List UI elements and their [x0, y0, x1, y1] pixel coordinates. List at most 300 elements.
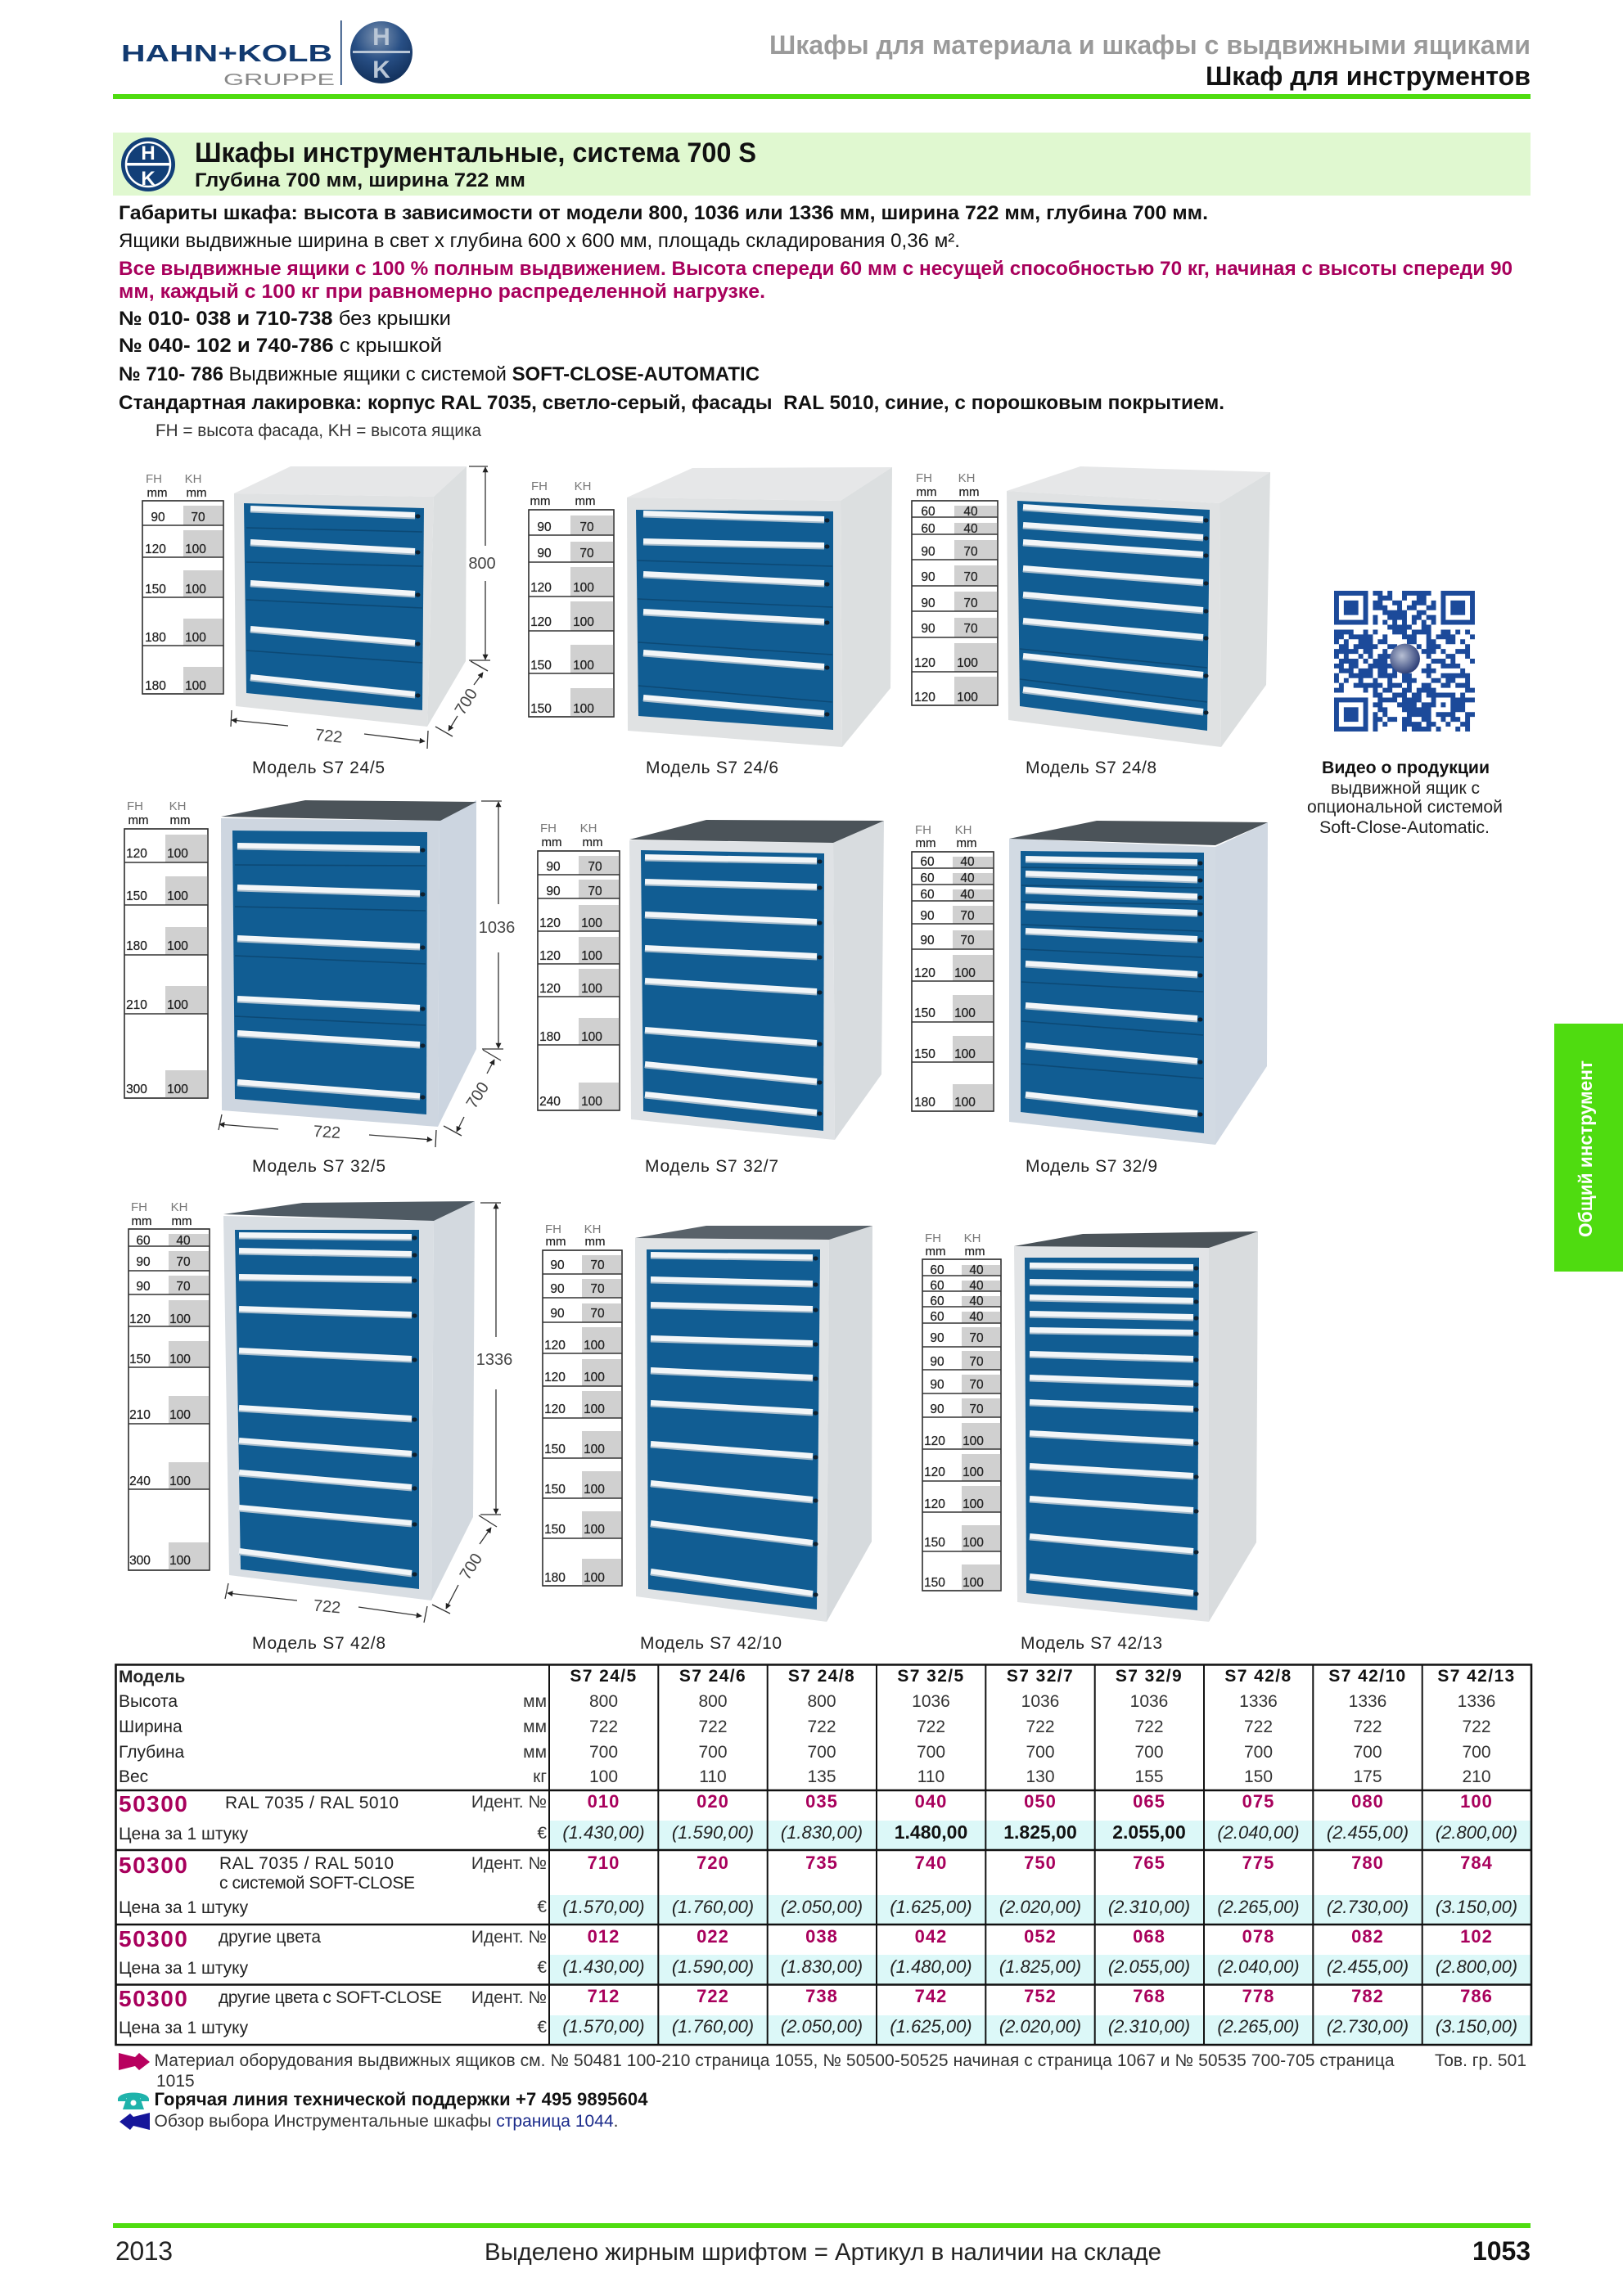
drawer size table: 120	[544, 1371, 566, 1384]
dimension lines: 700	[452, 686, 481, 718]
height row: 1336	[1349, 1692, 1386, 1711]
drawer size table: 70	[960, 909, 975, 923]
drawer size table: 60	[921, 522, 935, 536]
drawer size table	[124, 799, 208, 1098]
drawer size table: 70	[960, 934, 975, 948]
drawer size table: 60	[930, 1263, 944, 1277]
article block: other colours with SOFT-CLOSE: 738	[805, 1986, 838, 2006]
drawer size table: 100	[573, 702, 594, 716]
company logo: H	[372, 24, 390, 51]
drawer size table: 70	[588, 860, 602, 874]
article block: RAL with SOFT-CLOSE: 50300	[119, 1853, 188, 1878]
drawer size table: 70	[590, 1307, 605, 1321]
drawer size table: 100	[584, 1402, 605, 1416]
article block: other colours: (2.040,00)	[1217, 1956, 1300, 1977]
article block: RAL 7035 / RAL 5010: 100	[1460, 1791, 1493, 1812]
article block: other colours: 012	[588, 1926, 620, 1947]
article block: RAL with SOFT-CLOSE: (2.310,00)	[1108, 1897, 1190, 1917]
drawer size table: 100	[169, 1353, 191, 1366]
drawer size table: 60	[136, 1234, 151, 1248]
article block: other colours: 022	[697, 1926, 729, 1947]
footer: legend: Выделено жирным шрифтом = Артикул в наличии на складе	[485, 2239, 1161, 2266]
drawer size table: 100	[581, 916, 602, 930]
drawer size table: mm	[545, 1235, 566, 1249]
drawer size table: 150	[544, 1443, 566, 1456]
drawer size table: 60	[920, 888, 935, 902]
article block: other colours: (1.430,00)	[562, 1956, 645, 1977]
width row: 722	[698, 1717, 728, 1736]
QR code with product video note	[1307, 593, 1503, 837]
drawer size table: 70	[963, 622, 978, 636]
drawer size table: 120	[126, 847, 147, 861]
drawer size table: 150	[914, 1006, 935, 1020]
drawer size table: 180	[539, 1030, 561, 1044]
weight row: 175	[1353, 1767, 1382, 1786]
drawer size table: 100	[573, 615, 594, 629]
drawer size table: 120	[530, 615, 552, 629]
drawer size table: 70	[963, 545, 978, 559]
drawer size table: KH	[584, 1222, 601, 1236]
drawer size table: 70	[579, 520, 594, 534]
article block: other colours: (2.055,00)	[1108, 1956, 1190, 1977]
article block: RAL 7035 / RAL 5010: €	[537, 1824, 547, 1843]
article block: RAL 7035 / RAL 5010: 050	[1024, 1791, 1057, 1812]
article block: RAL with SOFT-CLOSE: Цена за 1 штуку	[119, 1898, 249, 1917]
drawer size table: 100	[584, 1523, 605, 1537]
drawer size table: mm	[915, 836, 936, 850]
drawer size table: 90	[151, 511, 165, 524]
article block: RAL 7035 / RAL 5010: Цена за 1 штуку	[119, 1825, 249, 1844]
article block: other colours: (2.455,00)	[1327, 1956, 1409, 1977]
panel: model S7 32/5	[124, 799, 515, 1176]
drawer size table: 300	[129, 1554, 151, 1568]
drawer size table: KH	[580, 822, 597, 835]
drawer size table: 100	[584, 1571, 605, 1585]
drawer size table	[142, 472, 223, 694]
model header row: S7 42/13	[1437, 1667, 1516, 1686]
cabinet illustration	[1014, 1231, 1258, 1622]
model label: Модель S7 42/10	[640, 1634, 782, 1653]
cabinet illustration	[1007, 466, 1270, 747]
drawer size table: 60	[930, 1294, 944, 1308]
drawer size table: 120	[924, 1434, 945, 1448]
depth row: 700	[1353, 1743, 1382, 1762]
drawer size table: 90	[930, 1355, 944, 1369]
drawer size table: mm	[170, 813, 190, 827]
company logo	[121, 20, 413, 89]
article block: other colours: 078	[1242, 1926, 1274, 1947]
article block: RAL 7035 / RAL 5010: (2.455,00)	[1327, 1822, 1409, 1843]
article block: other colours with SOFT-CLOSE: (3.150,00)	[1436, 2016, 1517, 2037]
banner subtitle: Глубина 700 мм, ширина 722 мм	[195, 169, 525, 191]
article block: other colours with SOFT-CLOSE: (2.310,00)	[1108, 2016, 1190, 2037]
drawer size table: 70	[963, 570, 978, 584]
weight row: 110	[917, 1767, 944, 1786]
width row	[589, 1717, 1491, 1736]
drawer size table: 100	[167, 998, 188, 1012]
article block: RAL 7035 / RAL 5010: 1.480,00	[895, 1821, 967, 1843]
drawer size table: 70	[588, 885, 602, 898]
article block: other colours with SOFT-CLOSE: (1.570,00)	[562, 2016, 645, 2037]
drawer size table	[922, 1231, 1001, 1591]
drawer size table: 40	[960, 888, 975, 902]
article block: RAL with SOFT-CLOSE: (2.730,00)	[1327, 1897, 1409, 1917]
drawer size table: 120	[914, 656, 935, 670]
drawer size table: 90	[537, 547, 552, 560]
article block: RAL with SOFT-CLOSE: с системой SOFT-CLOSE	[219, 1874, 415, 1893]
description text block: Все выдвижные ящики с 100 % полным выдвижением. Высота спереди 60 мм с несущей способностью 70 кг, начиная с высоты спереди 90	[119, 258, 1513, 280]
article block: RAL 7035 / RAL 5010: (2.800,00)	[1436, 1822, 1517, 1843]
drawer size table: 150	[924, 1576, 945, 1590]
drawer size table: 100	[167, 847, 188, 861]
drawer size table: mm	[128, 813, 149, 827]
drawer size table: 240	[539, 1095, 561, 1109]
drawer size table: 40	[969, 1263, 984, 1277]
article block: RAL 7035 / RAL 5010: 1.825,00	[1003, 1821, 1077, 1843]
article block: other colours with SOFT-CLOSE: 50300	[119, 1986, 188, 2011]
height row: 1036	[912, 1692, 950, 1711]
article block: RAL 7035 / RAL 5010: RAL 7035 / RAL 5010	[225, 1794, 399, 1812]
drawer size table: 100	[581, 1095, 602, 1109]
article block: RAL with SOFT-CLOSE: 735	[805, 1853, 838, 1873]
article block: RAL 7035 / RAL 5010: 010	[588, 1791, 620, 1812]
drawer size table: FH	[131, 1200, 147, 1214]
article block: other colours	[119, 1926, 1517, 1978]
QR code	[1334, 593, 1475, 729]
drawer size table: FH	[545, 1222, 561, 1236]
drawer size table: 70	[590, 1282, 605, 1296]
description text block: № 040- 102 и 740-786 с крышкой	[119, 335, 442, 357]
model header row: S7 24/6	[679, 1667, 746, 1686]
article block: RAL with SOFT-CLOSE: €	[537, 1898, 547, 1916]
drawer size table: 70	[590, 1258, 605, 1272]
dimension lines: 1036	[479, 919, 515, 937]
drawer size table: 90	[921, 597, 935, 610]
drawer size table: 60	[920, 871, 935, 885]
page subcategory heading: Шкаф для инструментов	[1206, 61, 1531, 91]
drawer size table: mm	[575, 494, 596, 508]
article block: other colours: (1.825,00)	[999, 1956, 1081, 1977]
model label: Модель S7 24/6	[646, 759, 778, 777]
footnote: technical hotline: Горячая линия технической поддержки +7 495 9895604	[154, 2089, 648, 2109]
footer: page number: 1053	[1472, 2236, 1531, 2266]
drawer size table: FH	[127, 799, 143, 813]
depth row: 700	[589, 1743, 618, 1762]
article block: RAL with SOFT-CLOSE: 780	[1351, 1853, 1384, 1873]
drawer size table: mm	[542, 835, 561, 849]
drawer size table: 90	[546, 885, 561, 898]
cabinet illustration	[221, 800, 476, 1127]
video caption: Soft-Close-Automatic.	[1319, 818, 1490, 837]
article block: RAL 7035 / RAL 5010: 075	[1242, 1791, 1274, 1812]
article block: RAL with SOFT-CLOSE: 740	[915, 1853, 947, 1873]
drawer size table: 100	[584, 1483, 605, 1497]
drawer size table: 300	[126, 1083, 147, 1096]
weight row: 150	[1244, 1767, 1273, 1786]
description text block: FH = высота фасада, KH = высота ящика	[156, 421, 481, 440]
weight row: 110	[699, 1767, 727, 1786]
banner title: Шкафы инструментальные, система 700 S	[195, 137, 756, 169]
video caption: выдвижной ящик с	[1331, 779, 1480, 798]
drawer size table: 150	[914, 1047, 935, 1061]
drawer size table: 70	[191, 511, 205, 524]
drawer size table: 240	[129, 1474, 151, 1488]
drawer size table: 70	[176, 1280, 191, 1294]
article block: RAL with SOFT-CLOSE: (1.760,00)	[672, 1897, 754, 1917]
drawer size table: 150	[544, 1483, 566, 1497]
icon: HK badge: H	[141, 142, 156, 164]
drawer size table: 60	[921, 505, 935, 519]
drawer size table: mm	[131, 1214, 152, 1228]
drawer size table: 100	[581, 1030, 602, 1044]
drawer size table: 150	[530, 659, 552, 673]
drawer size table: 150	[145, 583, 166, 597]
drawer size table: 70	[969, 1331, 984, 1345]
drawer size table: 40	[963, 505, 978, 519]
drawer size table: 90	[550, 1307, 565, 1321]
article block: RAL 7035 / RAL 5010: Идент. №	[471, 1793, 547, 1812]
panel: model S7 24/8	[912, 466, 1270, 777]
drawer size table: 100	[584, 1443, 605, 1456]
drawer size table: mm	[187, 486, 206, 500]
article block: other colours with SOFT-CLOSE: 722	[697, 1986, 729, 2006]
article block: other colours: 038	[805, 1926, 838, 1947]
drawer size table: 70	[969, 1402, 984, 1416]
drawer size table: 150	[544, 1523, 566, 1537]
article block: RAL with SOFT-CLOSE: RAL 7035 / RAL 5010	[219, 1854, 394, 1873]
panel: model S7 42/13	[922, 1231, 1258, 1653]
drawer size table: 100	[957, 656, 978, 670]
model header row: S7 32/7	[1007, 1667, 1074, 1686]
drawer size table: 100	[954, 1047, 976, 1061]
weight row: 155	[1134, 1767, 1164, 1786]
height row: 800	[698, 1692, 728, 1711]
drawer size table: 100	[957, 691, 978, 705]
row labels: specifications: мм	[523, 1692, 547, 1711]
model label: Модель S7 24/5	[252, 759, 385, 777]
width row: 722	[589, 1717, 618, 1736]
drawer size table: FH	[540, 822, 557, 835]
drawer size table: mm	[147, 486, 167, 500]
page category heading: Шкафы для материала и шкафы с выдвижными ящиками	[769, 30, 1531, 60]
row labels: specifications: Глубина	[119, 1743, 185, 1762]
drawer size table: 100	[169, 1408, 191, 1422]
drawer size table: 70	[579, 547, 594, 560]
drawer size table: 90	[537, 520, 552, 534]
depth row	[589, 1743, 1491, 1762]
width row: 722	[917, 1717, 945, 1736]
article block: other colours: €	[537, 1958, 547, 1977]
drawer size table: FH	[531, 479, 548, 493]
drawer size table	[912, 471, 998, 705]
drawer size table: 100	[584, 1371, 605, 1384]
weight row: 210	[1462, 1767, 1491, 1786]
row labels: specifications: Высота	[119, 1692, 178, 1711]
dimension lines: 722	[313, 1597, 341, 1617]
description text block	[119, 202, 1513, 440]
description text block: № 010- 038 и 710-738 без крышки	[119, 308, 451, 330]
width row: 722	[1462, 1717, 1491, 1736]
drawer size table: 100	[167, 889, 188, 903]
article block: RAL 7035 / RAL 5010: (1.430,00)	[562, 1822, 645, 1843]
dimension lines	[225, 1203, 512, 1623]
drawer size table: mm	[959, 485, 979, 499]
model label: Модель S7 42/8	[252, 1634, 385, 1653]
drawer size table: 100	[963, 1536, 984, 1550]
article block: RAL 7035 / RAL 5010: 50300	[119, 1791, 188, 1817]
drawer size table: 90	[550, 1258, 565, 1272]
drawer size table: 90	[930, 1331, 944, 1345]
price and specification table	[116, 1664, 1531, 2045]
article block: other colours: 068	[1133, 1926, 1165, 1947]
height row: 1336	[1239, 1692, 1278, 1711]
model header row: S7 24/8	[788, 1667, 855, 1686]
drawer size table: 100	[963, 1576, 984, 1590]
article block: RAL with SOFT-CLOSE: Идент. №	[471, 1854, 547, 1873]
article block: RAL with SOFT-CLOSE: (3.150,00)	[1436, 1897, 1517, 1917]
cabinet illustration	[627, 467, 892, 747]
article block: other colours: 50300	[119, 1926, 188, 1952]
article block: RAL with SOFT-CLOSE: 775	[1242, 1853, 1274, 1873]
drawer size table: KH	[171, 1200, 187, 1214]
row labels: specifications: кг	[533, 1767, 547, 1786]
drawer size table: 100	[954, 1006, 976, 1020]
drawer size table: 180	[145, 679, 166, 693]
drawer size table: mm	[584, 1235, 606, 1249]
model label: Модель S7 32/5	[252, 1157, 385, 1176]
drawer size table: 60	[920, 855, 935, 869]
dimension lines	[219, 801, 515, 1147]
drawer size table: 100	[169, 1312, 191, 1326]
description text block: Ящики выдвижные ширина в свет x глубина 600 x 600 мм, площадь складирования 0,36 м².	[119, 230, 960, 252]
drawer size table: 100	[581, 949, 602, 963]
drawer size table: mm	[956, 836, 977, 850]
row labels: specifications: Модель	[119, 1668, 185, 1686]
side tab: general tools	[1554, 1024, 1623, 1272]
article block: other colours: 042	[915, 1926, 947, 1947]
drawer size table: 100	[954, 966, 976, 980]
model header row: S7 42/10	[1328, 1667, 1407, 1686]
row labels: specifications: Вес	[119, 1767, 148, 1786]
cabinet illustration	[1009, 821, 1268, 1145]
drawer size table: mm	[964, 1245, 985, 1258]
article block: other colours: 052	[1024, 1926, 1057, 1947]
drawer size table: 100	[573, 659, 594, 673]
article block: other colours with SOFT-CLOSE: 786	[1460, 1986, 1493, 2006]
article block: RAL with SOFT-CLOSE: 765	[1133, 1853, 1165, 1873]
drawer size table: 180	[544, 1571, 566, 1585]
icon: HK badge: K	[141, 168, 156, 190]
drawer size table: mm	[172, 1214, 192, 1228]
article block: other colours: (1.480,00)	[890, 1956, 972, 1977]
drawer size table: 70	[176, 1255, 191, 1269]
article block: RAL 7035 / RAL 5010: 020	[697, 1791, 729, 1812]
article block: other colours with SOFT-CLOSE: 742	[915, 1986, 947, 2006]
drawer size table: 100	[581, 982, 602, 996]
drawer size table: 90	[546, 860, 561, 874]
article block: RAL with SOFT-CLOSE: 720	[697, 1853, 729, 1873]
dimension lines: 722	[314, 726, 343, 747]
width row: 722	[1134, 1717, 1164, 1736]
article block: other colours with SOFT-CLOSE: (2.020,00)	[999, 2016, 1081, 2037]
drawer size table	[538, 822, 620, 1110]
article block: RAL 7035 / RAL 5010: 2.055,00	[1112, 1821, 1186, 1843]
height row: 800	[807, 1692, 836, 1711]
model label: Модель S7 32/9	[1026, 1157, 1157, 1176]
drawer size table: 120	[539, 982, 561, 996]
panel: model S7 24/5	[142, 466, 496, 777]
drawer size table: mm	[530, 494, 550, 508]
description text block: Габариты шкафа: высота в зависимости от модели 800, 1036 или 1336 мм, ширина 722 мм, глубина 700 мм.	[119, 202, 1208, 224]
depth row: 700	[1244, 1743, 1273, 1762]
drawer size table: 100	[954, 1096, 976, 1110]
article block: RAL 7035 / RAL 5010: 040	[915, 1791, 947, 1812]
panel: model S7 42/8	[128, 1200, 512, 1653]
drawer size table: 150	[129, 1353, 151, 1366]
icon: HK badge	[121, 137, 175, 191]
company logo: GRUPPE	[223, 71, 335, 89]
drawer size table: 120	[129, 1312, 151, 1326]
article block: other colours with SOFT-CLOSE: (1.760,00)	[672, 2016, 754, 2037]
article block: other colours with SOFT-CLOSE: (2.050,00)	[781, 2016, 863, 2037]
drawer size table: KH	[185, 472, 201, 486]
depth row: 700	[1026, 1743, 1055, 1762]
article block: RAL 7035 / RAL 5010: (1.590,00)	[672, 1822, 754, 1843]
drawer size table: 100	[185, 679, 206, 693]
article block: RAL 7035 / RAL 5010	[119, 1791, 1517, 1844]
article block: other colours: Идент. №	[471, 1928, 547, 1947]
drawer size table: 90	[920, 934, 935, 948]
weight row: 130	[1026, 1767, 1055, 1786]
depth row: 700	[807, 1743, 836, 1762]
drawer size table: 60	[930, 1279, 944, 1293]
article block: other colours: 082	[1351, 1926, 1384, 1947]
video caption: опциональной системой	[1307, 798, 1503, 817]
drawer size table: 120	[539, 916, 561, 930]
description text block: мм, каждый с 100 кг при равномерно распределенной нагрузке.	[119, 281, 765, 303]
height row	[589, 1692, 1495, 1711]
model header row: S7 32/5	[897, 1667, 965, 1686]
article block: other colours: другие цвета	[219, 1928, 321, 1947]
footnote: equipment reference: Материал оборудования выдвижных ящиков см. № 50481 100-210 страница 1055, № 50500-50525 начиная с страница 1067 и № 50535 700-705 страница	[154, 2051, 1395, 2070]
article block: other colours with SOFT-CLOSE: 778	[1242, 1986, 1274, 2006]
drawer size table: 70	[969, 1378, 984, 1392]
drawer size table	[543, 1222, 622, 1586]
model header row: S7 24/5	[570, 1667, 638, 1686]
panel: model S7 32/9	[912, 821, 1268, 1176]
drawer size table: 120	[544, 1339, 566, 1353]
drawer size table: 210	[126, 998, 147, 1012]
drawer size table: 40	[176, 1234, 191, 1248]
dimension lines: 800	[468, 555, 496, 573]
drawer size table: 90	[930, 1378, 944, 1392]
article block: RAL with SOFT-CLOSE: (1.625,00)	[890, 1897, 972, 1917]
article block: RAL with SOFT-CLOSE: (2.020,00)	[999, 1897, 1081, 1917]
cabinet illustration	[629, 820, 884, 1140]
drawer size table: 90	[930, 1402, 944, 1416]
article block: other colours with SOFT-CLOSE: 768	[1133, 1986, 1165, 2006]
article block: other colours: (1.830,00)	[781, 1956, 863, 1977]
icon: phone	[118, 2093, 149, 2109]
panel: model S7 42/10	[543, 1222, 872, 1653]
drawer size table: 100	[169, 1474, 191, 1488]
drawer size table: 60	[930, 1310, 944, 1324]
description text block: Стандартная лакировка: корпус RAL 7035, светло-серый, фасады RAL 5010, синие, с порошковым покрытием.	[119, 392, 1224, 414]
drawer size table: 70	[969, 1355, 984, 1369]
dimension lines: 700	[463, 1079, 493, 1112]
drawer size table: 40	[969, 1310, 984, 1324]
article block: RAL 7035 / RAL 5010: (1.830,00)	[781, 1822, 863, 1843]
